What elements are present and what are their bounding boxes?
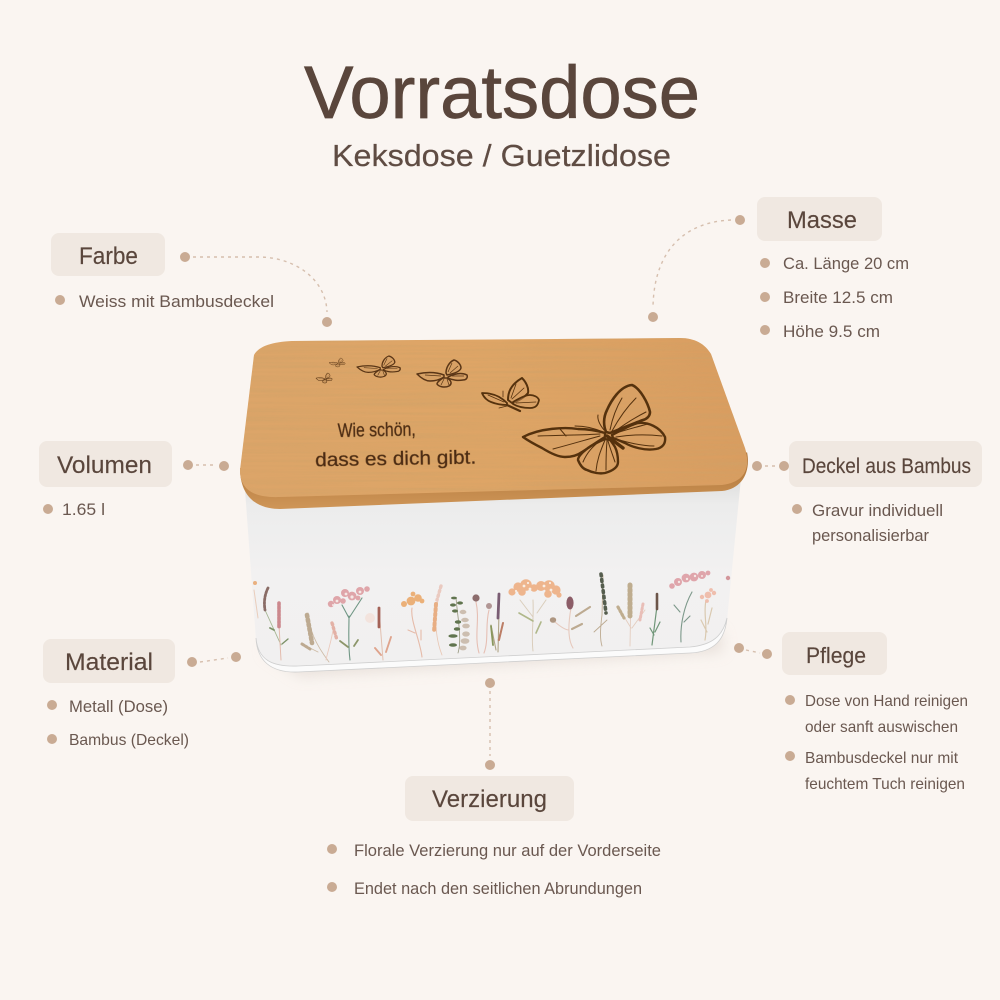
callout: Deckel aus Bambus: Gravur individuell bbox=[812, 502, 943, 520]
callout: Pflege: oder sanft auswischen bbox=[805, 719, 958, 736]
ground shadow bbox=[262, 632, 722, 676]
butterfly: small bbox=[417, 360, 467, 387]
callout: Pflege: feuchtem Tuch reinigen bbox=[805, 776, 965, 793]
callout: Masse: Breite 12.5 cm bbox=[783, 289, 893, 307]
connector bbox=[200, 658, 228, 662]
heading: Pflege bbox=[806, 643, 866, 668]
sprig: purple spike bbox=[491, 594, 503, 652]
callout: Deckel aus Bambus: personalisierbar bbox=[812, 527, 929, 545]
heading pill bbox=[39, 441, 172, 487]
connector bbox=[489, 691, 491, 756]
callout: Verzierung: Endet nach den seitlichen Abrundungen bbox=[354, 880, 642, 898]
bullet bbox=[792, 504, 802, 514]
engraved text bbox=[314, 419, 476, 471]
bullet bbox=[55, 295, 65, 305]
callout: Verzierung bbox=[327, 678, 661, 898]
sprig: far left bbox=[253, 581, 258, 618]
callout: Material: Bambus (Deckel) bbox=[69, 732, 189, 749]
butterfly: small upper bbox=[357, 356, 400, 377]
callout: Deckel aus Bambus bbox=[752, 441, 982, 545]
bullets bbox=[760, 258, 770, 268]
callout: Masse: Höhe 9.5 cm bbox=[783, 323, 880, 341]
title: Vorratsdose bbox=[304, 51, 700, 134]
butterfly: tiny upper bbox=[329, 358, 345, 367]
flower: pink umbel right bbox=[669, 571, 710, 642]
butterfly: tiny lower bbox=[316, 373, 332, 383]
sprig: eucalyptus bbox=[448, 597, 470, 653]
connector bbox=[193, 257, 327, 312]
sprig: dark leaves bbox=[594, 574, 607, 646]
sprig: pink spike bbox=[279, 603, 288, 660]
callout: Volumen: 1.65 l bbox=[62, 501, 105, 519]
callout: Pflege bbox=[734, 632, 968, 793]
callout: Masse: Ca. Länge 20 cm bbox=[783, 255, 909, 273]
heading pill bbox=[757, 197, 882, 241]
callout: Farbe bbox=[51, 233, 332, 327]
subtitle: Keksdose / Guetzlidose bbox=[332, 138, 671, 173]
heading: Farbe bbox=[79, 243, 138, 270]
bamboo lid edge bbox=[240, 452, 748, 509]
connector bbox=[765, 465, 777, 467]
sprig: dark spike bbox=[650, 594, 660, 645]
butterfly: large bbox=[523, 385, 665, 473]
bullet bbox=[43, 504, 53, 514]
sprig: brown lavender bbox=[264, 588, 281, 645]
sprig: dark buds bbox=[472, 594, 492, 653]
callout: Material bbox=[43, 639, 241, 749]
heading: Masse bbox=[787, 207, 857, 234]
sprig: far right bbox=[726, 576, 730, 580]
engraved butterflies bbox=[316, 356, 665, 473]
bullets bbox=[785, 695, 795, 705]
sprig: orange fern bbox=[434, 586, 442, 655]
heading: Verzierung bbox=[432, 786, 547, 813]
tin body bbox=[245, 478, 741, 671]
callout: Masse bbox=[648, 197, 909, 341]
heading pill bbox=[43, 639, 175, 683]
connector bbox=[746, 650, 760, 653]
sprig: buds and tan leaves bbox=[550, 596, 590, 648]
sprig: tan fern bbox=[302, 613, 329, 662]
flower: orange blossom bbox=[401, 592, 424, 657]
tin bottom rim bbox=[256, 618, 727, 672]
heading pill bbox=[782, 632, 887, 675]
connector bbox=[196, 464, 216, 466]
engraved text: dass es dich gibt. bbox=[315, 448, 476, 471]
callout: Pflege: Bambusdeckel nur mit bbox=[805, 750, 959, 767]
floral decoration bbox=[253, 571, 730, 662]
heading pill bbox=[51, 233, 165, 276]
heading pill bbox=[405, 776, 574, 821]
connector bbox=[653, 220, 731, 307]
callout: Volumen bbox=[39, 441, 229, 519]
callout: Pflege: Dose von Hand reinigen bbox=[805, 693, 968, 710]
butterfly: medium bbox=[482, 378, 539, 411]
flower: peach blossom bbox=[700, 588, 716, 640]
engraved text: Wie schön, bbox=[337, 420, 416, 442]
sprig: tan fern right bbox=[618, 585, 645, 646]
product: storage tin with bamboo lid bbox=[235, 335, 755, 676]
flower: orange umbel bbox=[508, 579, 562, 651]
heading: Deckel aus Bambus bbox=[802, 455, 971, 478]
flower: pink umbel bbox=[328, 586, 370, 660]
callout: Material: Metall (Dose) bbox=[69, 698, 168, 716]
flower: pale blossom and red spike bbox=[365, 608, 391, 660]
callout: Farbe: Weiss mit Bambusdeckel bbox=[79, 293, 274, 311]
heading pill bbox=[789, 441, 982, 487]
bullets bbox=[47, 700, 57, 710]
heading: Material bbox=[65, 649, 153, 676]
heading: Volumen bbox=[57, 452, 152, 479]
callout: Verzierung: Florale Verzierung nur auf der Vorderseite bbox=[354, 842, 661, 860]
bullets bbox=[327, 844, 337, 854]
bamboo lid top bbox=[235, 335, 755, 500]
sprig: small pink fern bbox=[326, 623, 337, 660]
